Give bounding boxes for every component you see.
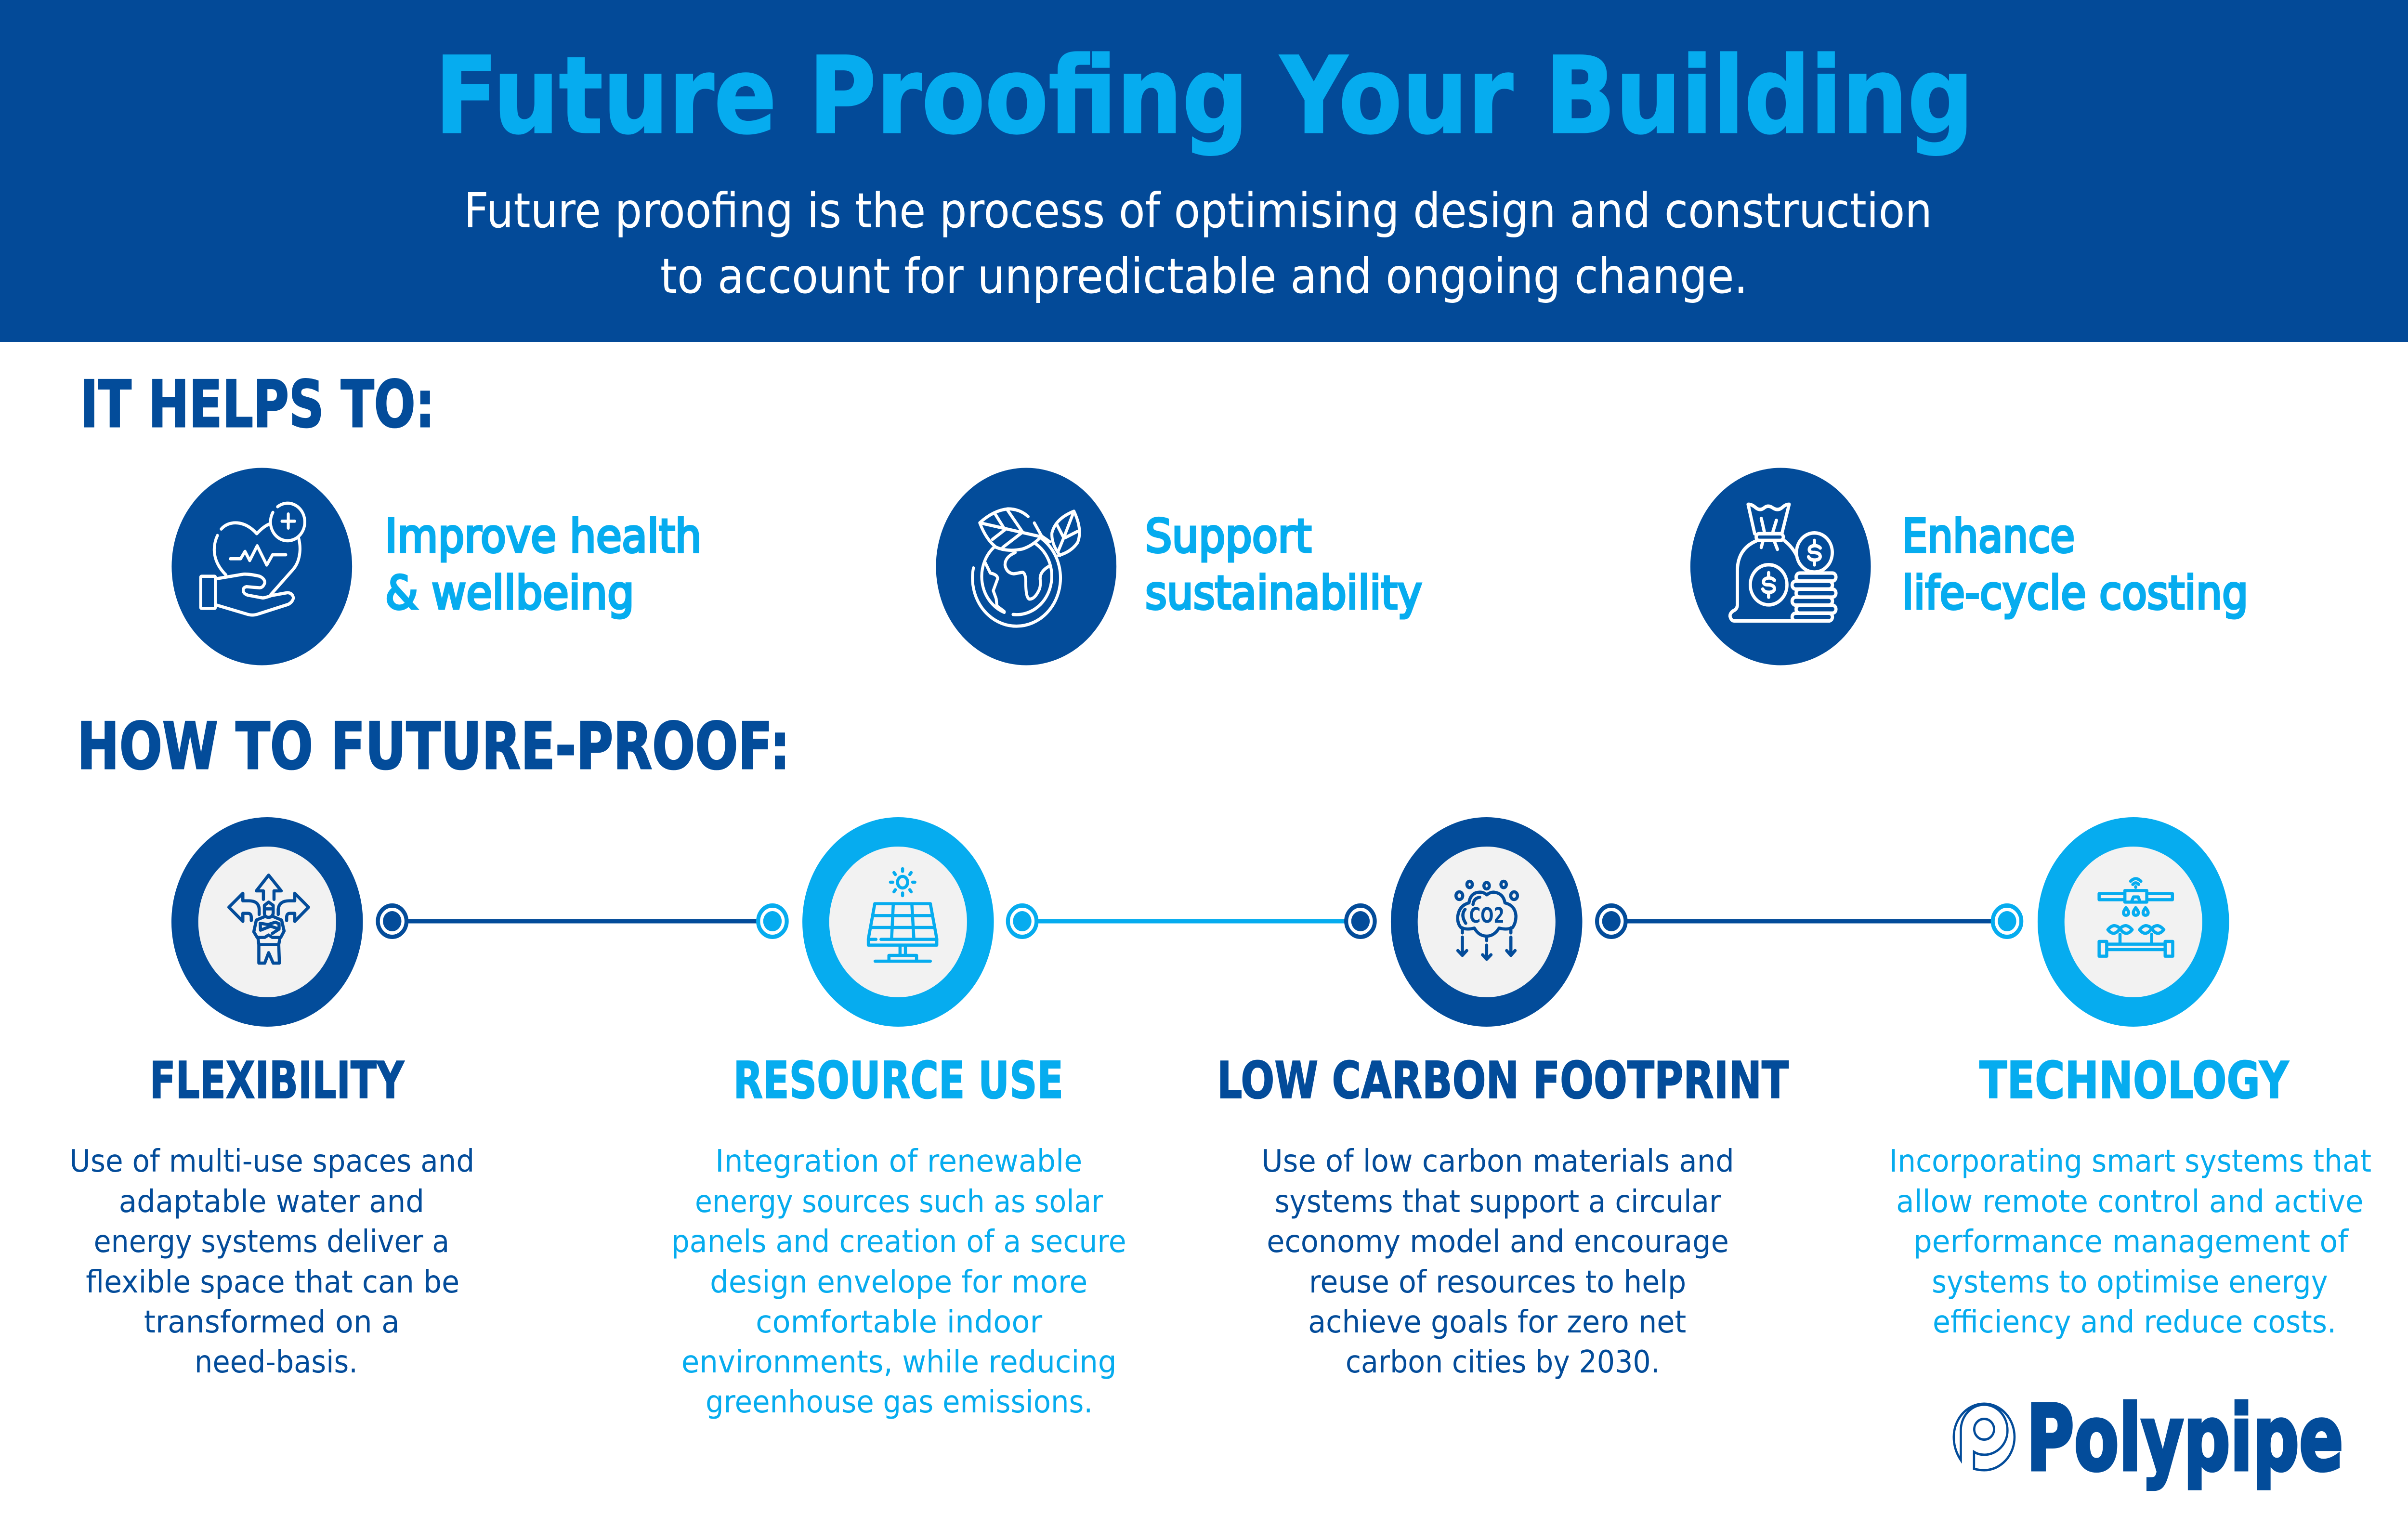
description: Use of multi-use spaces and	[69, 1144, 474, 1179]
panel: low carbon footprint	[1217, 832, 1789, 1380]
header banner	[0, 0, 2408, 342]
description: transformed on a	[144, 1305, 400, 1340]
subtitle: Future proofing is the process of optimising design and construction	[464, 183, 1932, 239]
label: Support	[1145, 510, 1311, 563]
icon: globe with leaves	[936, 468, 1116, 666]
description: environments, while reducing	[681, 1344, 1117, 1380]
label: Improve health	[385, 510, 702, 563]
connector: resource use to low carbon	[1008, 905, 1375, 937]
subtitle: to account for unpredictable and ongoing change.	[660, 248, 1748, 304]
description	[1261, 1144, 1734, 1380]
description: economy model and encourage	[1267, 1224, 1729, 1260]
description: greenhouse gas emissions.	[706, 1384, 1093, 1420]
description	[69, 1144, 474, 1380]
connector: flexibility to resource use	[378, 905, 787, 937]
description: panels and creation of a secure	[671, 1224, 1126, 1260]
label: life-cycle costing	[1902, 567, 2248, 620]
description	[1889, 1144, 2371, 1340]
label	[385, 510, 702, 620]
panel: technology	[1889, 832, 2371, 1340]
icon: CO2 cloud	[1404, 832, 1569, 1012]
description: need-basis.	[195, 1344, 358, 1380]
benefit: sustainability	[936, 468, 1422, 666]
connector: low carbon to technology	[1597, 905, 2021, 937]
description: energy sources such as solar	[695, 1184, 1103, 1220]
icon: person with arrows	[185, 832, 350, 1012]
description: systems to optimise energy	[1932, 1265, 2328, 1300]
panel: flexibility	[69, 832, 474, 1380]
heading: LOW CARBON FOOTPRINT	[1217, 1051, 1789, 1110]
panel: resource use	[671, 832, 1126, 1420]
icon: money bag and coins	[1690, 468, 1871, 666]
description: carbon cities by 2030.	[1346, 1344, 1660, 1380]
description: efficiency and reduce costs.	[1933, 1305, 2336, 1340]
description	[671, 1144, 1126, 1420]
heading: it helps to: IT HELPS TO:	[80, 367, 435, 442]
heading: how to future-proof: HOW TO FUTURE-PROOF:	[77, 709, 790, 784]
description: design envelope for more	[710, 1265, 1087, 1300]
description: flexible space that can be	[86, 1265, 459, 1300]
heading: TECHNOLOGY	[1979, 1051, 2289, 1110]
icon: logo mark	[1954, 1404, 2015, 1470]
description: adaptable water and	[119, 1184, 424, 1220]
icon: CO2 cloud: CO2	[1469, 903, 1505, 927]
description: reuse of resources to help	[1309, 1265, 1686, 1300]
icon: heart in hand	[171, 468, 352, 666]
heading: RESOURCE USE	[733, 1051, 1063, 1110]
description: performance management of	[1913, 1224, 2349, 1260]
logo: Polypipe	[1954, 1386, 2343, 1491]
label	[1902, 510, 2248, 620]
description: Use of low carbon materials and	[1261, 1144, 1734, 1179]
description: achieve goals for zero net	[1308, 1305, 1686, 1340]
label: & wellbeing	[385, 567, 634, 620]
description: Integration of renewable	[715, 1144, 1082, 1179]
description: energy systems deliver a	[94, 1224, 449, 1260]
heading: FLEXIBILITY	[150, 1051, 405, 1110]
description: allow remote control and active	[1896, 1184, 2364, 1220]
benefit: health and wellbeing	[171, 468, 702, 666]
subtitle	[464, 183, 1932, 304]
description: comfortable indoor	[756, 1305, 1043, 1340]
icon: solar panel	[816, 832, 981, 1012]
title: Future Proofing Your Building	[435, 34, 1974, 157]
label: sustainability	[1145, 567, 1422, 620]
description: Incorporating smart systems that	[1889, 1144, 2371, 1179]
icon: smart irrigation	[2051, 832, 2216, 1012]
description: systems that support a circular	[1275, 1184, 1721, 1220]
label: Enhance	[1902, 510, 2075, 563]
label	[1145, 510, 1422, 620]
benefit: life-cycle costing	[1690, 468, 2248, 666]
